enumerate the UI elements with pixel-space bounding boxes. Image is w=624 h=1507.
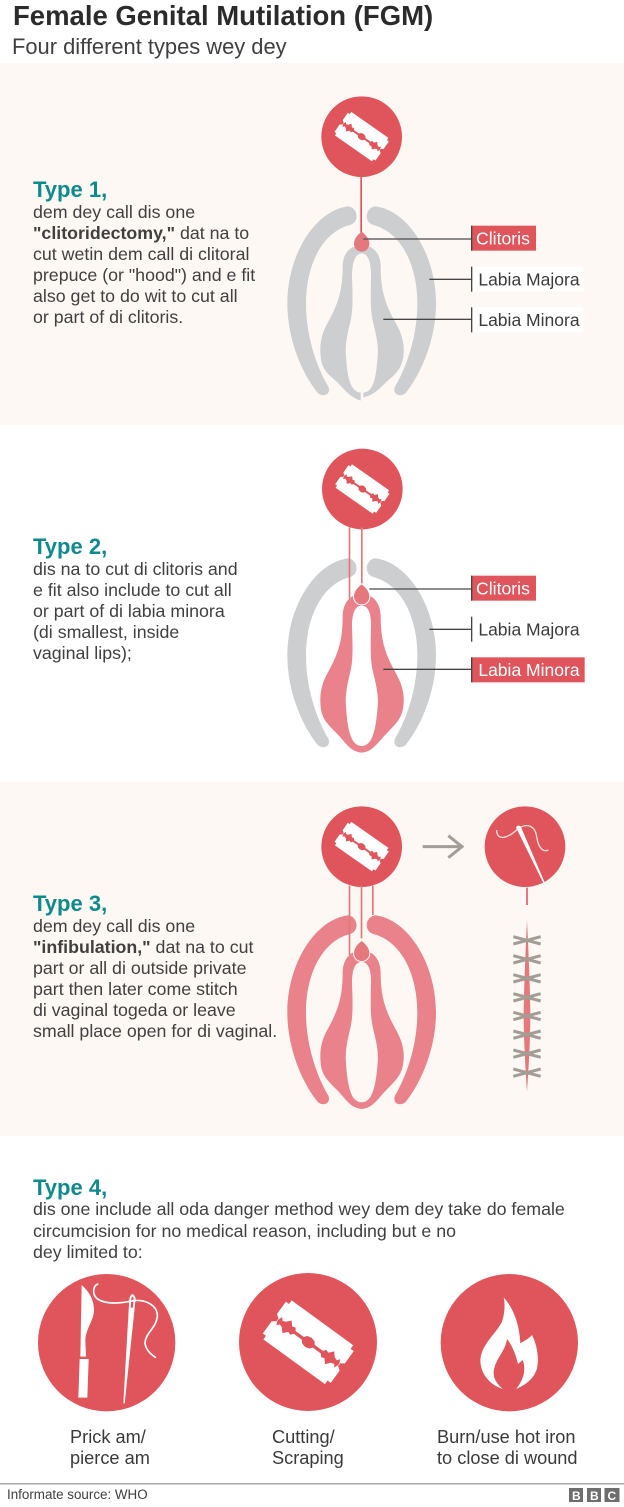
source: Informate source: WHO — [7, 1487, 148, 1502]
caption: cutting: Cutting/ — [272, 1427, 336, 1447]
type 1 text block: dem dey call dis one — [33, 202, 195, 222]
stitched wound — [513, 920, 541, 1092]
caption: prick: pierce am — [70, 1448, 150, 1468]
footer rule — [0, 1483, 624, 1484]
label: clitoris: Clitoris — [476, 229, 530, 249]
label: labia minora: Labia Minora — [478, 310, 580, 330]
type 3 text block: part then later come stitch — [33, 979, 238, 999]
icon: flame — [441, 1274, 578, 1411]
title: Female Genital Mutilation (FGM) — [13, 0, 433, 31]
arrow — [423, 836, 462, 858]
type 3 text block: "infibulation," dat na to cut — [33, 937, 253, 957]
type 1 text block: cut wetin dem call di clitoral — [33, 244, 249, 264]
label: clitoris — [363, 226, 536, 251]
caption: burn: to close di wound — [437, 1448, 578, 1468]
label: labia minora — [383, 657, 585, 682]
icon: razor blade — [321, 806, 402, 887]
label: labia majora — [429, 267, 583, 292]
caption: cutting — [272, 1427, 344, 1468]
icon: razor blade — [239, 1273, 377, 1411]
type 2 diagram — [287, 449, 585, 753]
caption: prick — [70, 1427, 150, 1468]
BBC logo: B — [572, 1489, 581, 1503]
icon: needle and thread — [485, 806, 565, 887]
panel: type 4 — [33, 1175, 578, 1468]
type 2 text block: dis na to cut di clitoris and — [33, 559, 238, 579]
type 2 text block: Type 2, — [33, 534, 107, 559]
type 2 text block: or part of di labia minora — [33, 601, 225, 621]
type 4 text block: dis one include all oda danger method wey dem dey take do female — [33, 1199, 565, 1219]
BBC logo: C — [608, 1489, 616, 1503]
label: labia majora: Labia Majora — [478, 270, 580, 290]
caption: prick: Prick am/ — [70, 1427, 147, 1447]
type 4 text block: Type 4, — [33, 1175, 107, 1200]
type 1 text block: "clitoridectomy," dat na to — [33, 223, 249, 243]
type 3 diagram — [287, 806, 565, 1109]
type 2 text block: e fit also include to cut all — [33, 580, 232, 600]
type 4 text block: circumcision for no medical reason, including but e no — [33, 1221, 456, 1241]
BBC logo — [569, 1488, 620, 1503]
icon: knife and needle — [38, 1274, 175, 1411]
caption: burn: Burn/use hot iron — [437, 1427, 576, 1447]
panel: type 2 — [33, 449, 585, 753]
type 1 text block: Type 1, — [33, 177, 107, 202]
type 3 text block: dem dey call dis one — [33, 916, 195, 936]
subtitle: Four different types wey dey — [12, 34, 287, 59]
type 1 text block: also get to do wit to cut all — [33, 286, 238, 306]
label: labia minora: Labia Minora — [478, 660, 580, 680]
type 1 text block: prepuce (or "hood") and e fit — [33, 265, 255, 285]
type 3 text block: di vaginal togeda or leave — [33, 1000, 236, 1020]
type 1 diagram — [287, 96, 583, 401]
panel: type 3 — [0, 782, 624, 1136]
type 2 text block: vaginal lips); — [33, 643, 132, 663]
label: clitoris: Clitoris — [476, 579, 530, 599]
label: labia majora: Labia Majora — [478, 620, 580, 640]
type 4 text block: dey limited to: — [33, 1242, 143, 1262]
type 4 text block — [33, 1175, 565, 1262]
type 3 text block: Type 3, — [33, 891, 107, 916]
label: clitoris — [369, 576, 536, 601]
type 2 text block — [33, 534, 238, 663]
BBC logo: B — [590, 1489, 599, 1503]
icon: razor blade — [321, 96, 402, 177]
icon: razor blade — [322, 449, 403, 529]
type 2 text block: (di smallest, inside — [33, 622, 179, 642]
type 3 text block: small place open for di vaginal. — [33, 1021, 277, 1041]
panel: type 1 — [0, 63, 624, 425]
type 1 text block — [33, 177, 255, 327]
caption: burn — [437, 1427, 578, 1468]
type 3 text block — [33, 891, 277, 1041]
label: labia minora — [383, 307, 583, 332]
type 1 text block: or part of di clitoris. — [33, 307, 183, 327]
caption: cutting: Scraping — [272, 1448, 344, 1468]
type 3 text block: part or all di outside private — [33, 958, 247, 978]
